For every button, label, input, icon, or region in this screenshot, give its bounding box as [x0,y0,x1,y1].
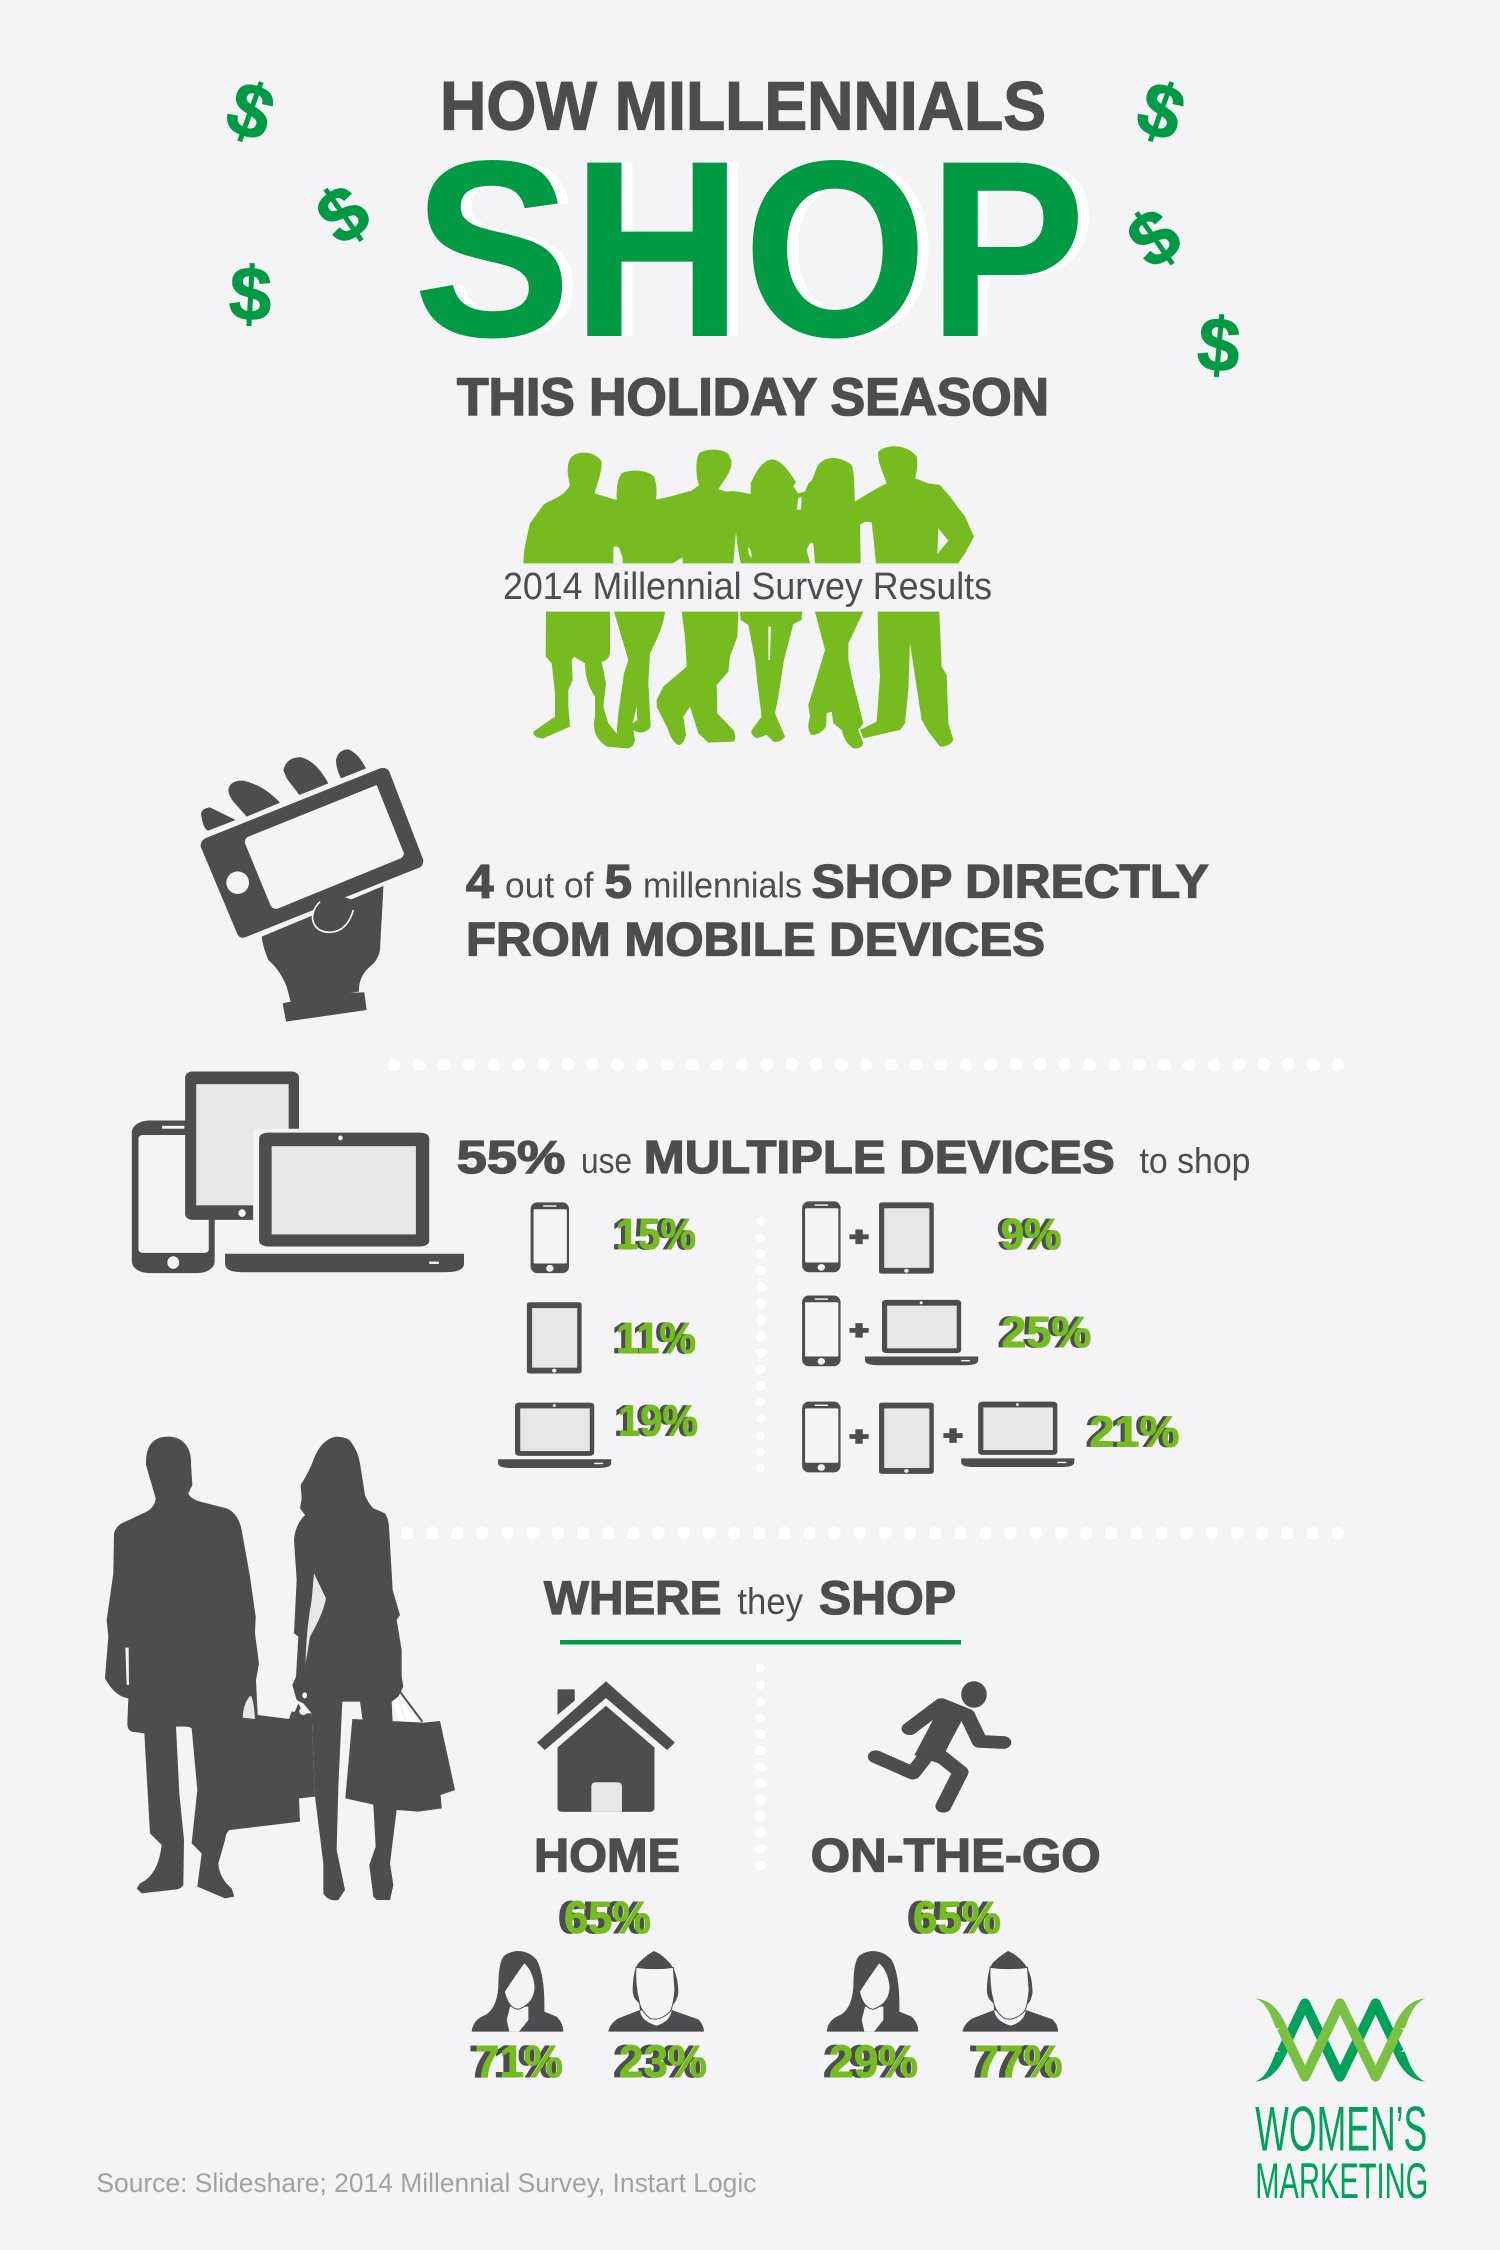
stat: on-the-go women: 29% [823,2036,912,2087]
stat: phone plus tablet: 9% [997,1210,1058,1259]
stat: home women: 71% [469,2036,557,2087]
icon: dollar signs: $ [1194,301,1244,390]
icon: house [537,1681,675,1812]
stat: on-the-go men: 77% [969,2036,1057,2087]
stat: on-the-go overall: 65% [913,1892,1001,1943]
stat: on-the-go women: 29% [829,2036,918,2087]
illustration: group of millennials [523,446,974,748]
stat: home men: 23% [613,2036,701,2087]
icon: dollar signs: $ [227,251,274,338]
icon: dollar signs: $ [1126,64,1195,159]
subtitle: survey results: 2014 Millennial Survey Results [503,566,992,608]
title: shop: SHOP [413,109,1086,390]
heading: where they shop: WHERE [544,1571,721,1624]
stat: laptop only: 19% [614,1396,694,1446]
text: multiple devices heading [457,1131,1251,1183]
text: multiple devices heading: to shop [1140,1140,1250,1181]
stat: phone plus laptop: 25% [1001,1308,1091,1357]
stat: phone only: 15% [616,1210,696,1259]
icon: hand holding phone [201,749,423,1022]
stat: home overall: 65% [564,1892,651,1943]
chart: single device icons [498,1202,611,1468]
text: mobile shopping stat: SHOP DIRECTLY [812,854,1209,908]
stat: home women: 71% [475,2036,563,2087]
stat: phone plus laptop: 25% [997,1308,1087,1357]
text: mobile shopping stat: FROM MOBILE DEVICES [466,913,1045,966]
text: multiple devices heading: use [581,1140,632,1181]
stat: laptop only: 19% [618,1396,698,1446]
chart: device combination icons [802,1201,1074,1474]
icons: women and men [472,1951,1058,2032]
source note: Source: Slideshare; 2014 Millennial Survey, Instart Logic [96,2168,756,2198]
icon: phone tablet and laptop [132,1072,464,1273]
label: home: HOME [534,1828,680,1882]
logo: women's marketing [1255,1998,1428,2209]
illustration: shopping couple silhouette [105,1437,455,1900]
icon: running person [876,1681,1003,1806]
text: mobile shopping stat: out of [505,864,594,906]
title: shop: SHOP [424,109,1097,390]
text: multiple devices heading: MULTIPLE DEVICES [644,1131,1115,1183]
stat: phone only: 15% [612,1210,692,1259]
stat: on-the-go overall: 65% [907,1892,995,1943]
icon: dollar signs: $ [302,168,385,262]
stat: home overall: 65% [558,1892,645,1943]
text: mobile shopping stat: millennials [643,864,802,906]
stat: all three devices: 21% [1086,1408,1176,1457]
text: mobile shopping stat: 4 [466,854,494,908]
text: mobile shopping stat: 5 [605,854,632,908]
stat: phone plus tablet: 9% [1001,1210,1062,1259]
stat: all three devices: 21% [1090,1408,1180,1457]
heading: where they shop [544,1571,961,1644]
heading: where they shop: SHOP [819,1571,956,1624]
label: on-the-go: ON-THE-GO [811,1828,1101,1882]
text: multiple devices heading: 55% [457,1131,565,1183]
icon: dollar signs [216,64,1244,390]
icon: dollar signs: $ [216,64,285,159]
title: this holiday season: THIS HOLIDAY SEASON [457,368,1049,427]
icon: dollar signs: $ [1113,191,1196,285]
stat: tablet only: 11% [616,1314,696,1363]
stat: on-the-go men: 77% [975,2036,1063,2087]
text: mobile shopping stat [466,854,1209,966]
stat: home men: 23% [619,2036,707,2087]
title: how millennials: HOW MILLENNIALS [440,68,1046,144]
stat: tablet only: 11% [612,1314,692,1363]
heading: where they shop: they [737,1581,803,1622]
